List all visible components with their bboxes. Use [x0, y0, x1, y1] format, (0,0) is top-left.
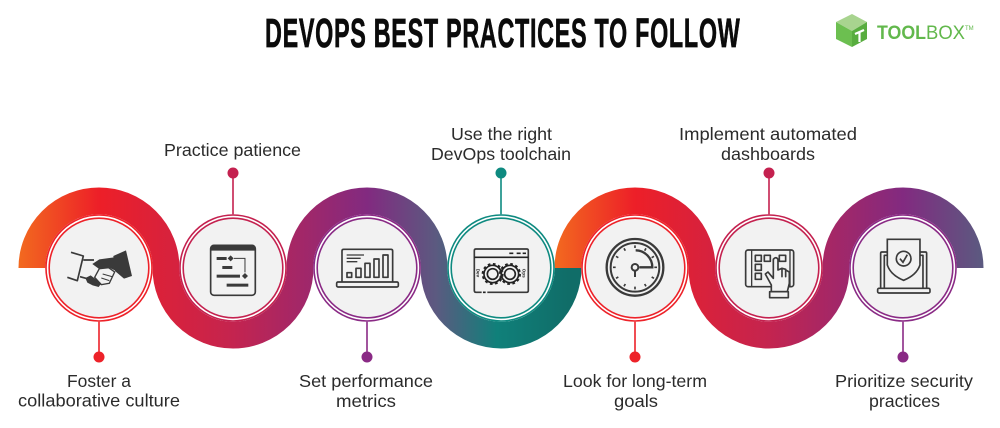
label 5: goals	[614, 391, 658, 411]
title: DEVOPS BEST PRACTICES TO FOLLOW	[265, 11, 740, 57]
connector 1	[94, 320, 104, 362]
connector 6	[764, 168, 774, 216]
icon: touch dashboard tablet	[746, 250, 794, 298]
logo: Toolbox: BOX	[926, 22, 965, 44]
step 2: practice patience	[164, 140, 301, 322]
icon: gauge	[607, 239, 663, 296]
badge 1	[45, 214, 153, 322]
label 1: collaborative culture	[18, 390, 180, 410]
step 7: prioritize security practices	[835, 214, 973, 411]
logo: Toolbox: TOOL	[877, 22, 926, 44]
icon: security shield laptop	[878, 239, 930, 293]
badge 2	[179, 214, 287, 322]
label 7: practices	[869, 391, 940, 411]
label 5	[563, 371, 707, 411]
icon: handshake	[67, 250, 132, 287]
connector 5	[630, 320, 640, 362]
label 2: Practice patience	[164, 140, 301, 160]
label 6: Implement automated	[679, 124, 857, 144]
connector 3	[362, 320, 372, 362]
badge 3	[313, 214, 421, 322]
ribbon: first wave	[32, 201, 568, 335]
badge 6	[715, 214, 823, 322]
step 3: set performance metrics	[299, 214, 433, 411]
label 4	[431, 124, 571, 164]
badge 4	[447, 214, 555, 322]
icon: workflow board	[211, 245, 255, 295]
icon: devops gears window: Ops	[522, 269, 527, 278]
badge 7	[849, 214, 957, 322]
label 3: Set performance	[299, 371, 433, 391]
connector 2	[228, 168, 238, 216]
label 4: Use the right	[451, 124, 552, 144]
icon: devops gears window: Dev	[476, 269, 481, 278]
icon: devops gears window	[474, 249, 528, 292]
label 1	[18, 371, 180, 410]
logo: Toolbox: TM	[965, 26, 974, 32]
label 6	[679, 124, 857, 164]
logo: Toolbox	[836, 14, 974, 47]
label 5: Look for long-term	[563, 371, 707, 391]
step 5: look for long-term goals	[563, 214, 707, 411]
badge 5	[581, 214, 689, 322]
label 4: DevOps toolchain	[431, 144, 571, 164]
label 3: metrics	[336, 391, 396, 411]
label 1: Foster a	[67, 371, 131, 391]
label 3	[299, 371, 433, 411]
label 7	[835, 371, 973, 411]
connector 7	[898, 320, 908, 362]
ribbon: second wave	[568, 201, 970, 335]
step 1: foster a collaborative culture	[18, 214, 180, 410]
step 4: use the right devops toolchain	[431, 124, 571, 322]
label 6: dashboards	[721, 144, 815, 164]
label 7: Prioritize security	[835, 371, 973, 391]
icon: laptop bar chart	[337, 249, 398, 287]
connector 4	[496, 168, 506, 216]
step 6: implement automated dashboards	[679, 124, 857, 322]
